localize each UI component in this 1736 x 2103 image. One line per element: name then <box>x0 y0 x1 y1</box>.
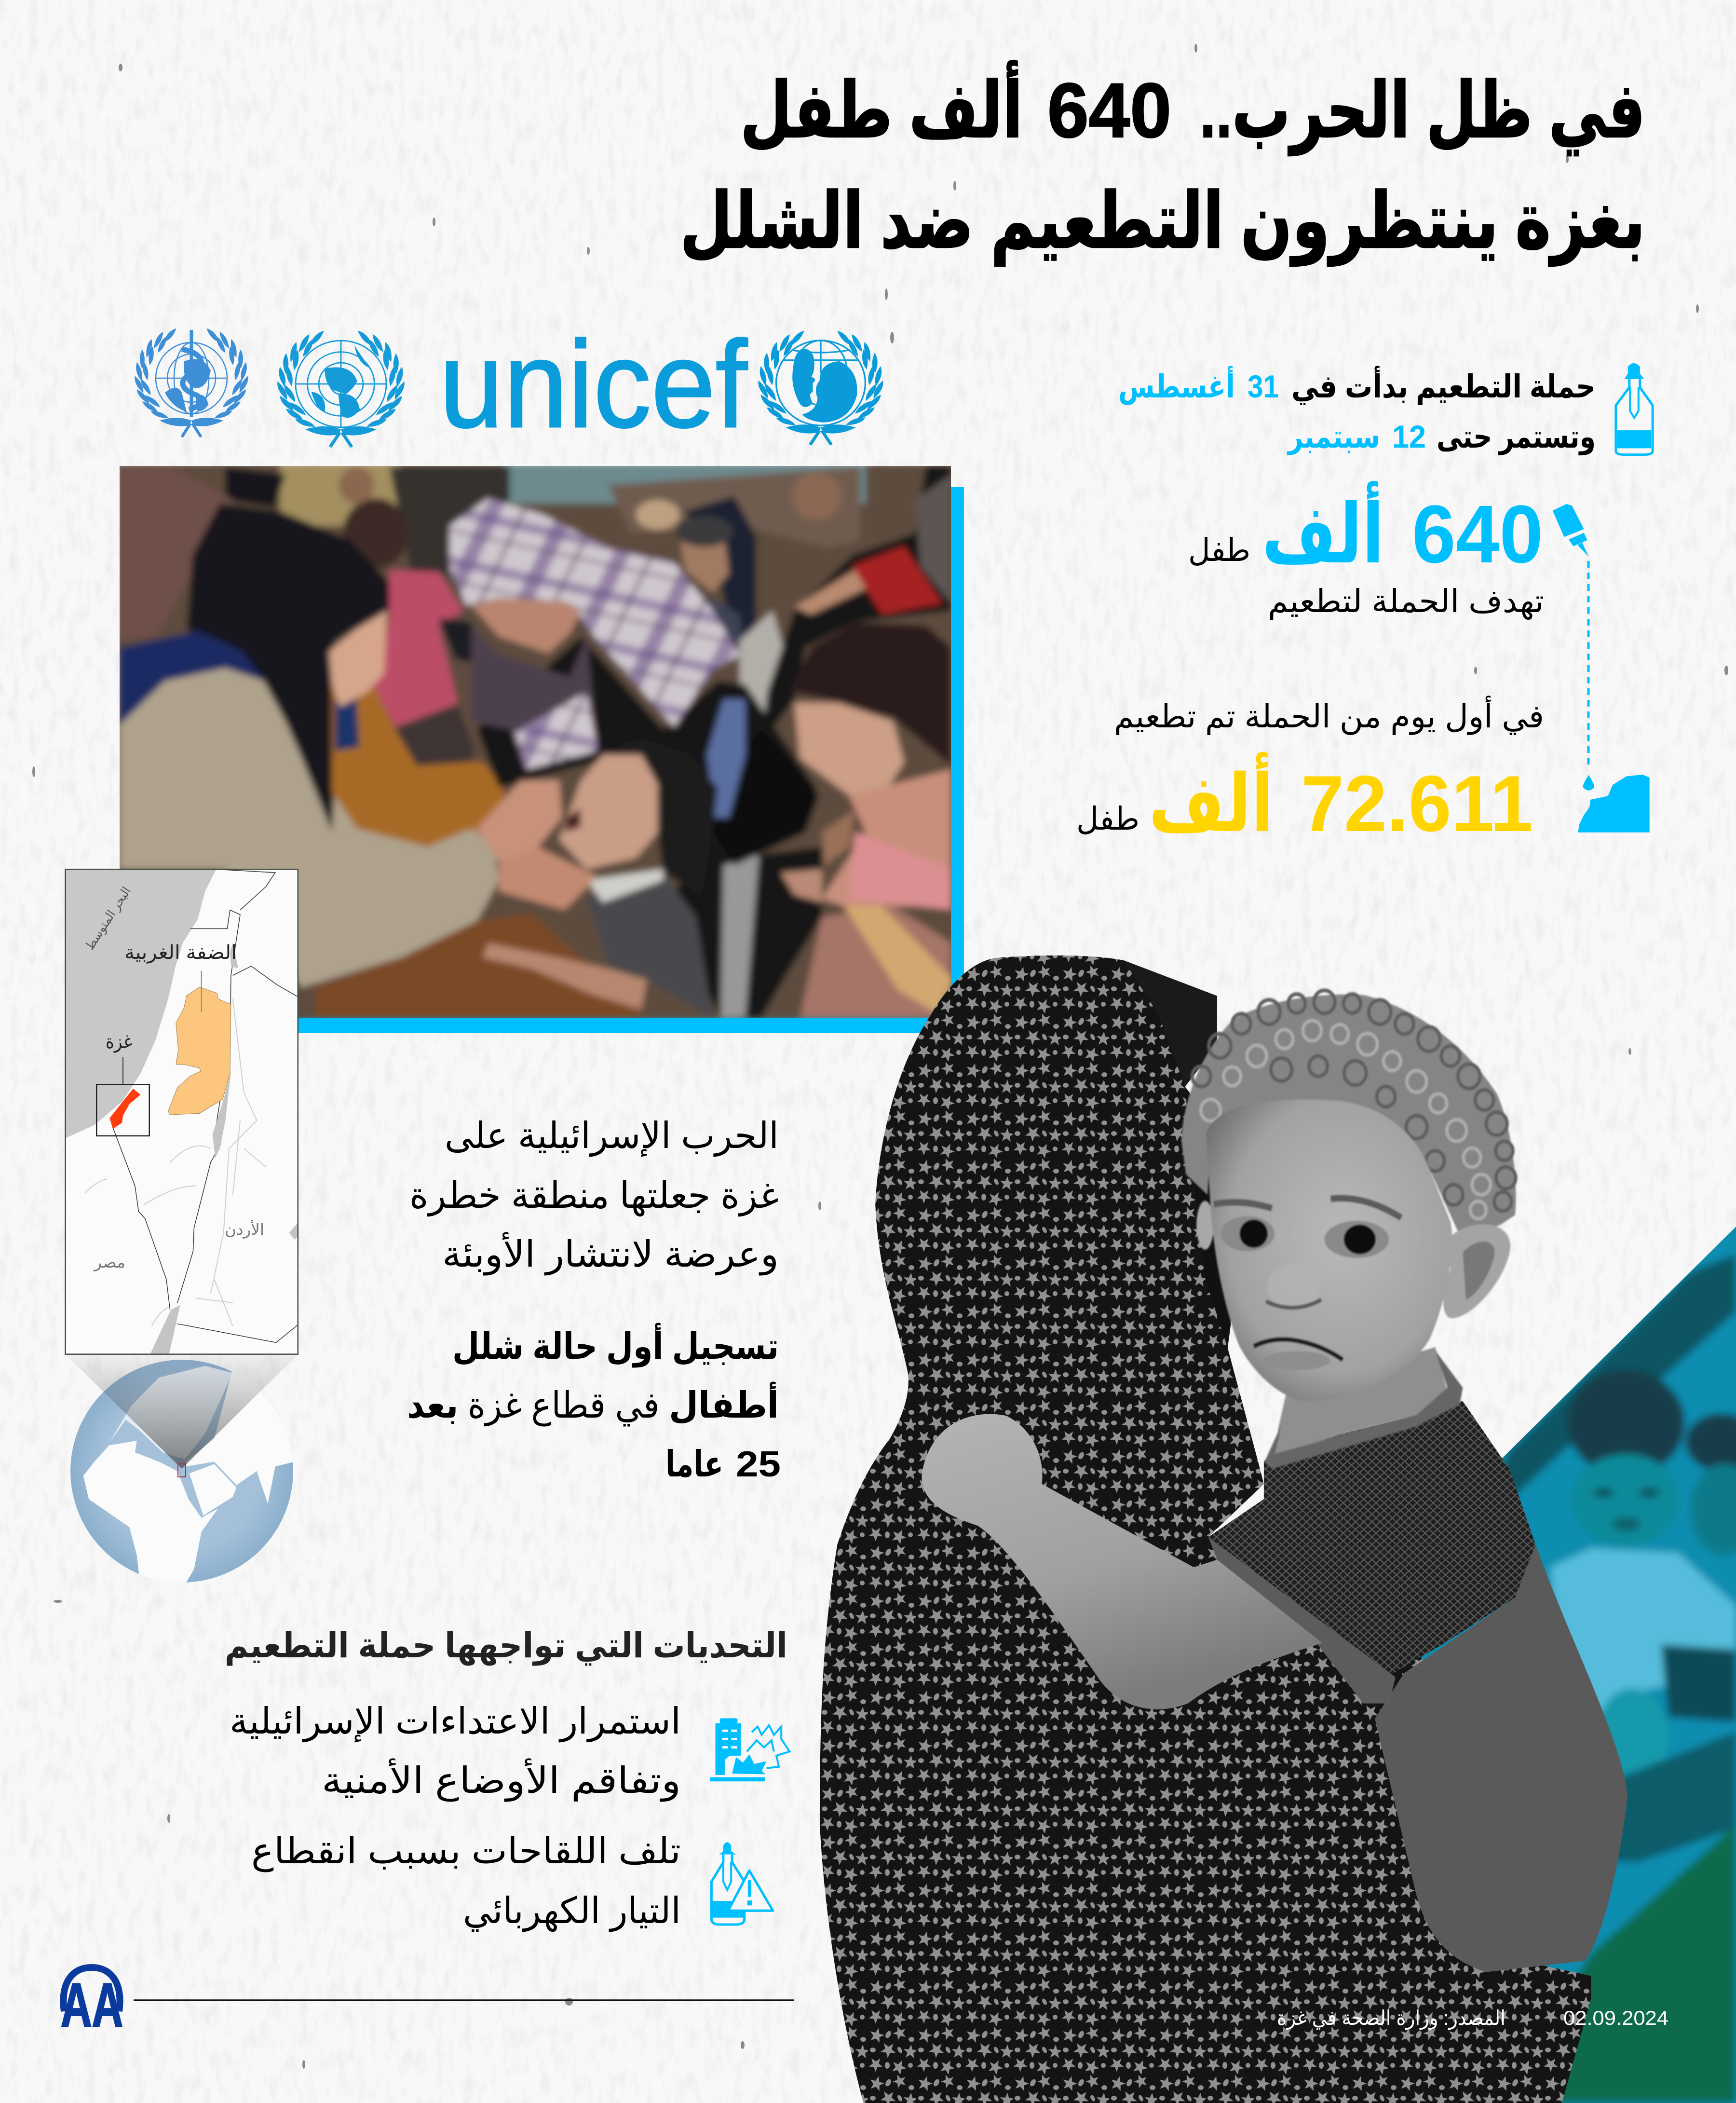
child mouth <box>1263 1351 1330 1370</box>
body text: first polio case: أطفال في قطاع غزة بعد <box>407 1381 779 1427</box>
text: start date <box>1118 366 1596 405</box>
source line: المصدر: وزارة الصحة في غزة <box>1277 2007 1505 2030</box>
map label: Jordan: الأردن <box>225 1220 264 1239</box>
text: start date: 31 <box>1248 369 1279 404</box>
map label: Mediterranean: البحر المتوسط <box>82 884 134 953</box>
child nose <box>1267 1263 1320 1309</box>
map: Gaza and West Bank location <box>66 869 298 1354</box>
logo: WHO emblem <box>131 326 252 437</box>
body text: epidemic risk: وعرضة لانتشار الأوبئة <box>442 1232 779 1276</box>
text: end date: سبتمبر <box>1287 419 1380 455</box>
stat: 72,611 vaccinated on first day <box>1076 696 1650 848</box>
mother in patterned dress <box>820 956 1591 2103</box>
challenge 1: استمرار الاعتداءات الإسرائيلية <box>230 1701 681 1743</box>
stat: 640 thousand target <box>1188 481 1588 620</box>
challenge 2 <box>251 1830 773 1932</box>
child hair <box>1181 995 1516 1235</box>
body text: first polio case: تسجيل أول حالة شلل <box>452 1323 779 1368</box>
body text: epidemic risk: غزة جعلتها منطقة خطرة <box>409 1175 779 1217</box>
child arm <box>922 1414 1322 1709</box>
logo: Anadolu Agency: AA <box>61 1971 123 2040</box>
body text: epidemic risk <box>409 1115 779 1276</box>
title: 640 <box>1047 67 1171 153</box>
logo: Anadolu Agency <box>61 1967 123 2040</box>
body text: epidemic risk: الحرب الإسرائيلية على <box>445 1115 779 1157</box>
child right ear <box>1443 1224 1510 1318</box>
stats: campaign dates <box>1118 363 1653 456</box>
blue frame behind photo <box>298 487 964 1033</box>
map label: West Bank: الضفة الغربية <box>124 942 237 964</box>
challenge 2: التيار الكهربائي <box>463 1890 681 1932</box>
globe locator <box>66 1354 298 1588</box>
map label: Egypt: مصر <box>93 1254 125 1271</box>
arrow: dashed drip line <box>1587 561 1589 769</box>
child mesh shirt <box>1208 1401 1535 1681</box>
child head <box>1181 990 1516 1469</box>
number: 72.611: 72.611 <box>1301 759 1533 848</box>
child lower shirt <box>1375 1544 1628 1972</box>
heading: التحديات التي تواجهها حملة التطعيم <box>225 1626 787 1666</box>
text: end date: وتستمر حتى <box>1437 419 1596 456</box>
logos: WHO, UN, UNICEF <box>131 315 887 453</box>
child neck and collar <box>1275 1347 1448 1455</box>
challenge 2: تلف اللقاحات بسبب انقطاع <box>251 1830 681 1872</box>
body text: first polio case: 25 <box>736 1444 781 1484</box>
logo: unicef wordmark: unicef <box>439 315 748 453</box>
body text: first polio case <box>407 1323 781 1484</box>
text: start date: حملة التطعيم بدأت في <box>1291 366 1596 405</box>
date: 02.09.2024 <box>1563 2007 1668 2029</box>
child eyes <box>1221 1216 1275 1251</box>
icon: vaccine bottle <box>1616 363 1653 455</box>
text: target description: تهدف الحملة لتطعيم <box>1268 583 1544 620</box>
icon: spoiled vaccine with warning <box>711 1842 773 1925</box>
map: Mediterranean Sea <box>66 869 216 1138</box>
mother carrying child, black and white cutout <box>820 956 1628 2103</box>
label: children: طفل <box>1076 801 1139 836</box>
child left ear <box>1196 1201 1214 1250</box>
text: first day: في أول يوم من الحملة تم تطعيم <box>1114 696 1544 735</box>
challenge 1 <box>230 1701 790 1802</box>
map label: Gaza: غزة <box>106 1031 132 1053</box>
number unit: thousand: ألف <box>1149 752 1274 848</box>
teal photo panel: children being vaccinated <box>1421 1227 1736 2103</box>
locator funnel <box>66 1354 298 1469</box>
challenge 1: وتفاقم الأوضاع الأمنية <box>322 1758 681 1802</box>
map: West Bank <box>169 987 231 1115</box>
text: end date <box>1287 419 1596 456</box>
map: Gaza Strip <box>109 1089 140 1129</box>
label: children: طفل <box>1188 532 1250 568</box>
icon: drop and open mouth <box>1578 775 1650 833</box>
icon: bombed building <box>710 1718 790 1781</box>
number: 640: 640 <box>1412 489 1543 580</box>
logo: UN emblem <box>273 328 408 447</box>
number unit: thousand: ألف <box>1262 481 1384 580</box>
title: ألف طفل <box>740 60 1023 153</box>
title <box>680 60 1645 266</box>
child face <box>1206 1099 1452 1401</box>
challenges section <box>225 1626 790 1932</box>
logo: UNICEF emblem <box>755 328 887 445</box>
text: end date: 12 <box>1392 419 1426 454</box>
icon: dropper <box>1553 504 1588 557</box>
body text: first polio case: عاما <box>665 1444 723 1484</box>
photo: health worker vaccinating a child <box>116 463 959 1021</box>
text: start date: أغسطس <box>1118 366 1235 405</box>
